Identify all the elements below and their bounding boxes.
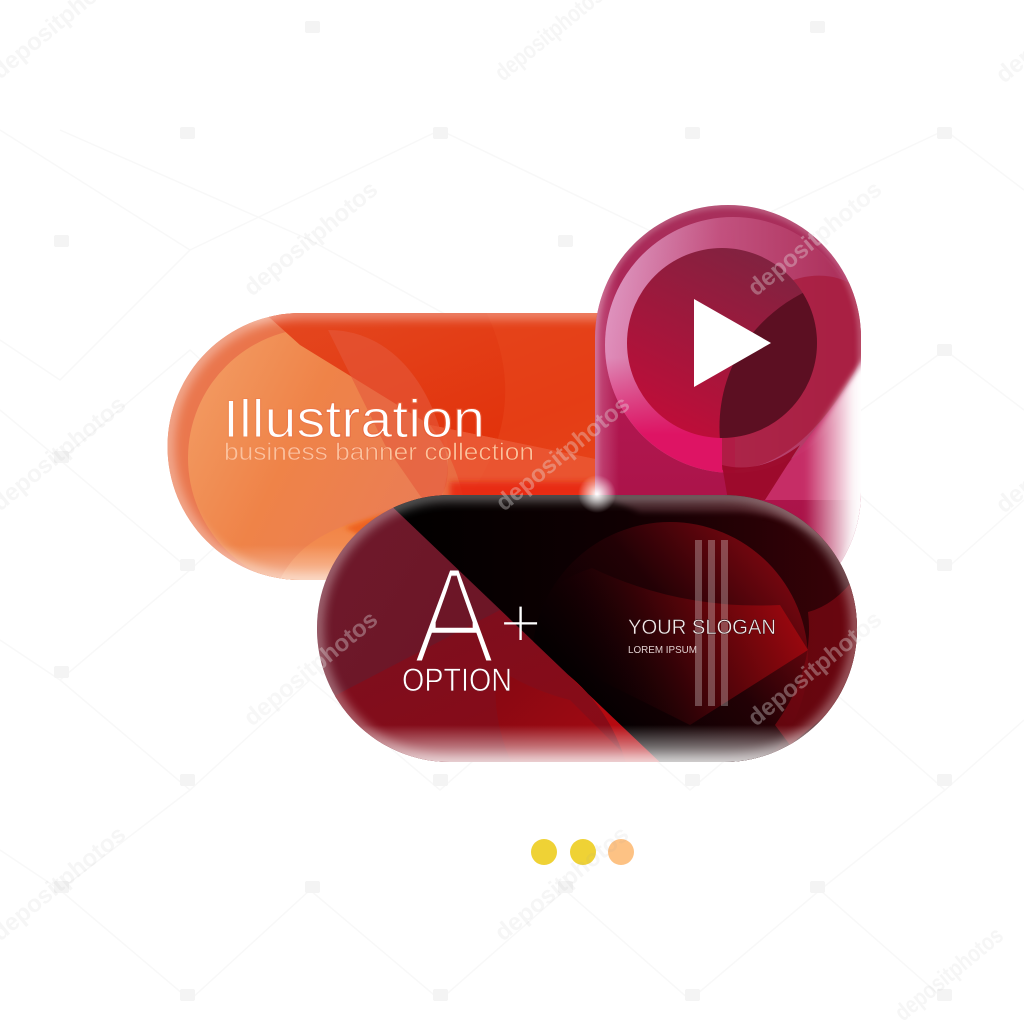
panel: magenta pill with play button	[595, 205, 861, 564]
text: LOREM IPSUM: LOREM IPSUM	[628, 645, 697, 656]
text: A+: A	[412, 539, 496, 693]
watermarks over the banners: depositphotos	[743, 176, 887, 302]
text: YOUR SLOGAN: YOUR SLOGAN	[628, 616, 776, 639]
decorative slogan bars	[695, 540, 728, 706]
watermarks: depositphotos	[490, 821, 634, 947]
panel: orange pill banner	[168, 313, 598, 580]
pagination dots	[531, 839, 634, 865]
icon: play disc	[627, 248, 830, 440]
watermarks over the banners: depositphotos	[491, 391, 635, 517]
watermarks: depositphotos	[239, 176, 383, 302]
watermarks over the banners: depositphotos	[743, 606, 887, 732]
watermarks over the banners: depositphotos	[239, 606, 383, 732]
text: A+: +	[499, 581, 542, 664]
sparkle highlight	[578, 475, 616, 513]
text: OPTION: OPTION	[402, 662, 512, 698]
icon: play triangle	[694, 299, 771, 387]
heading: Illustration: Illustration	[223, 390, 485, 449]
panel: dark red pill	[317, 495, 857, 762]
subheading: business banner collection: business banner collection	[224, 439, 534, 466]
watermarks over the banners	[239, 176, 887, 732]
